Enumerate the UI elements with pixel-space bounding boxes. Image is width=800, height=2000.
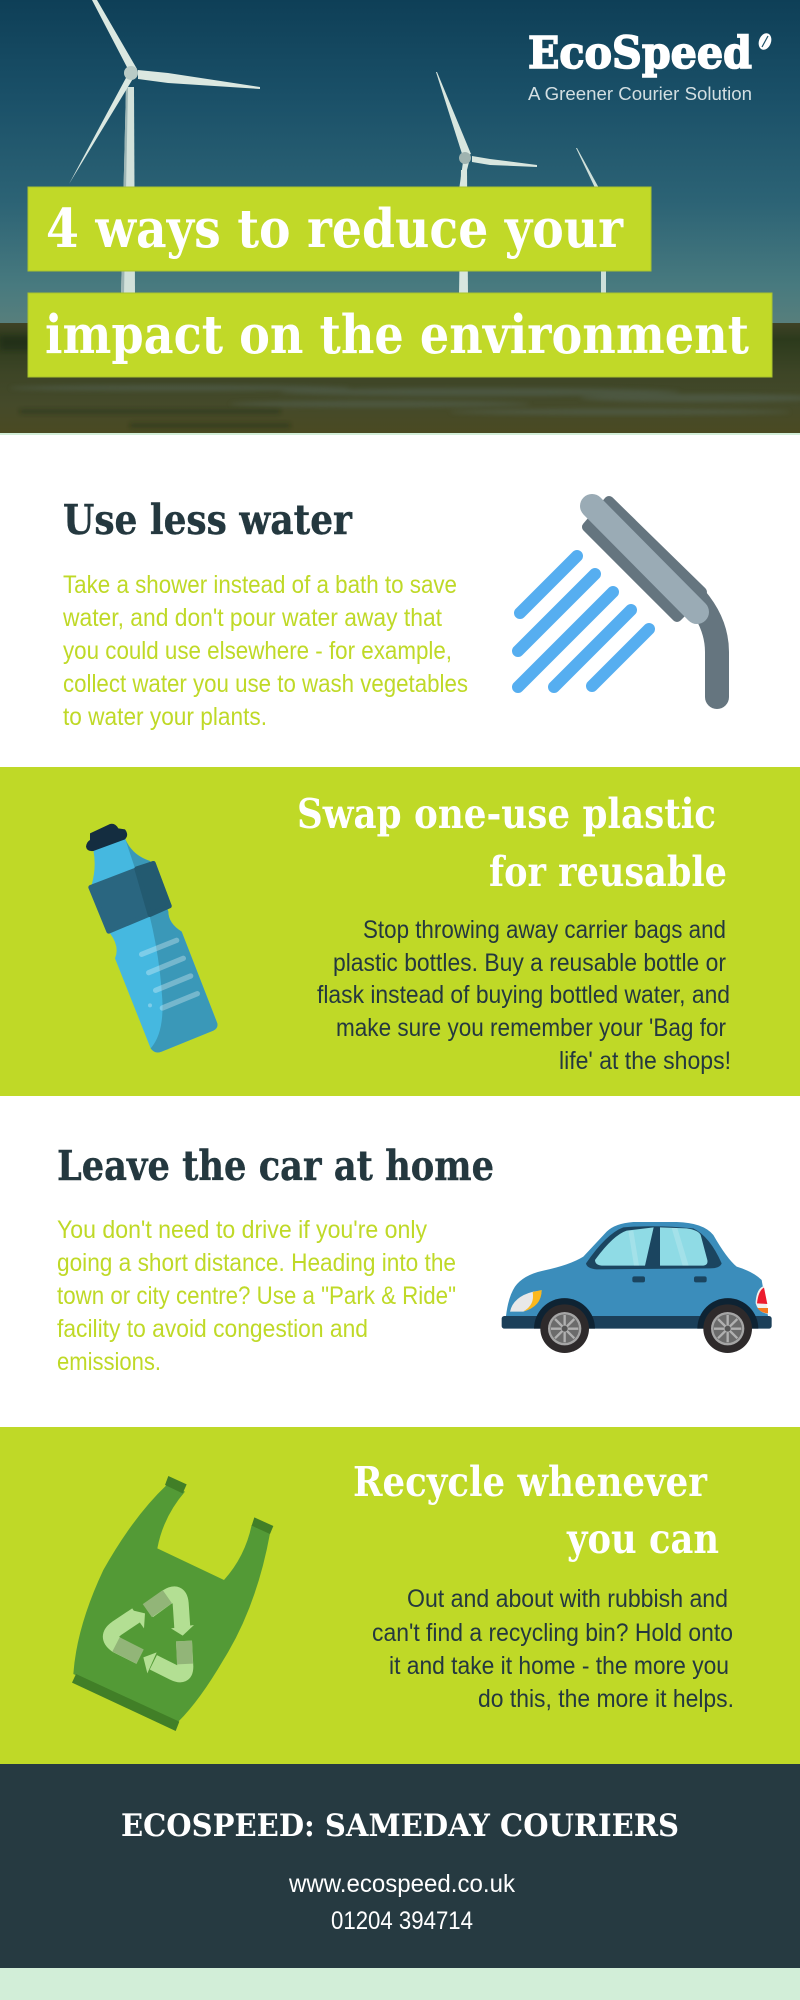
footer heading: ECOSPEED: SAMEDAY COURIERS xyxy=(121,1808,679,1844)
text: use less water: collect water you use to wash vegetables xyxy=(63,670,468,698)
text: recycle: can't find a recycling bin? Hold onto xyxy=(372,1619,733,1647)
footer website: www.ecospeed.co.uk xyxy=(288,1870,515,1898)
text: leave the car: emissions. xyxy=(57,1348,161,1376)
text: use less water: to water your plants. xyxy=(63,703,267,731)
text: leave the car: town or city centre? Use a "Park & Ride" xyxy=(57,1282,456,1310)
logo: EcoSpeed xyxy=(528,28,752,79)
text: recycle xyxy=(372,1585,734,1713)
wind turbine 1 xyxy=(69,0,260,295)
text: leave the car: You don't need to drive if you're only xyxy=(57,1216,427,1244)
text: leave the car: facility to avoid congestion and xyxy=(57,1315,368,1343)
logo: A Greener Courier Solution xyxy=(528,84,752,104)
hero ground xyxy=(0,323,800,433)
text: swap plastic: plastic bottles. Buy a reusable bottle or xyxy=(333,949,726,977)
logo xyxy=(528,28,774,104)
text: swap plastic: make sure you remember your 'Bag for xyxy=(336,1014,726,1042)
heading: swap plastic: for reusable xyxy=(489,848,727,896)
panel: footer xyxy=(0,1764,800,1968)
wind turbine 3 xyxy=(576,148,606,295)
heading: use less water: Use less water xyxy=(63,496,353,544)
title line 1 xyxy=(28,187,651,271)
text: use less water: Take a shower instead of a bath to save xyxy=(63,571,457,599)
panel: leave the car xyxy=(0,1096,800,1427)
bottom mint strip xyxy=(0,1968,800,2000)
text: swap plastic: life' at the shops! xyxy=(559,1047,731,1075)
panel: recycle xyxy=(0,1427,800,1764)
logo leaf xyxy=(756,31,774,52)
wind turbine 2 xyxy=(436,72,537,295)
text: recycle: do this, the more it helps. xyxy=(478,1685,734,1713)
text: swap plastic xyxy=(317,916,731,1075)
heading: swap plastic: Swap one-use plastic xyxy=(297,790,716,838)
icon: car xyxy=(502,1222,772,1353)
heading: recycle xyxy=(353,1458,719,1563)
footer phone: 01204 394714 xyxy=(331,1907,473,1935)
heading: recycle: Recycle whenever xyxy=(353,1458,708,1506)
text: swap plastic: Stop throwing away carrier bags and xyxy=(363,916,726,944)
icon: shower xyxy=(518,501,717,697)
icon: recycling bag xyxy=(72,1476,273,1731)
text: recycle: it and take it home - the more you xyxy=(389,1652,729,1680)
text: use less water: water, and don't pour water away that xyxy=(62,604,442,632)
hero banner xyxy=(0,0,800,433)
text: recycle: Out and about with rubbish and xyxy=(407,1585,728,1613)
text: use less water xyxy=(62,571,468,731)
text: leave the car xyxy=(57,1216,456,1376)
text: leave the car: going a short distance. Heading into the xyxy=(57,1249,456,1277)
heading: swap plastic xyxy=(297,790,727,896)
text: swap plastic: flask instead of buying bottled water, and xyxy=(317,981,730,1009)
icon: bottle xyxy=(86,824,217,1052)
panel: use less water xyxy=(0,433,800,767)
hero sky xyxy=(0,0,800,325)
panel: swap plastic xyxy=(0,767,800,1096)
title line 1: 4 ways to reduce your xyxy=(46,198,624,260)
heading: leave the car: Leave the car at home xyxy=(57,1142,494,1190)
heading: recycle: you can xyxy=(566,1515,719,1563)
text: use less water: you could use elsewhere - for example, xyxy=(63,637,452,665)
